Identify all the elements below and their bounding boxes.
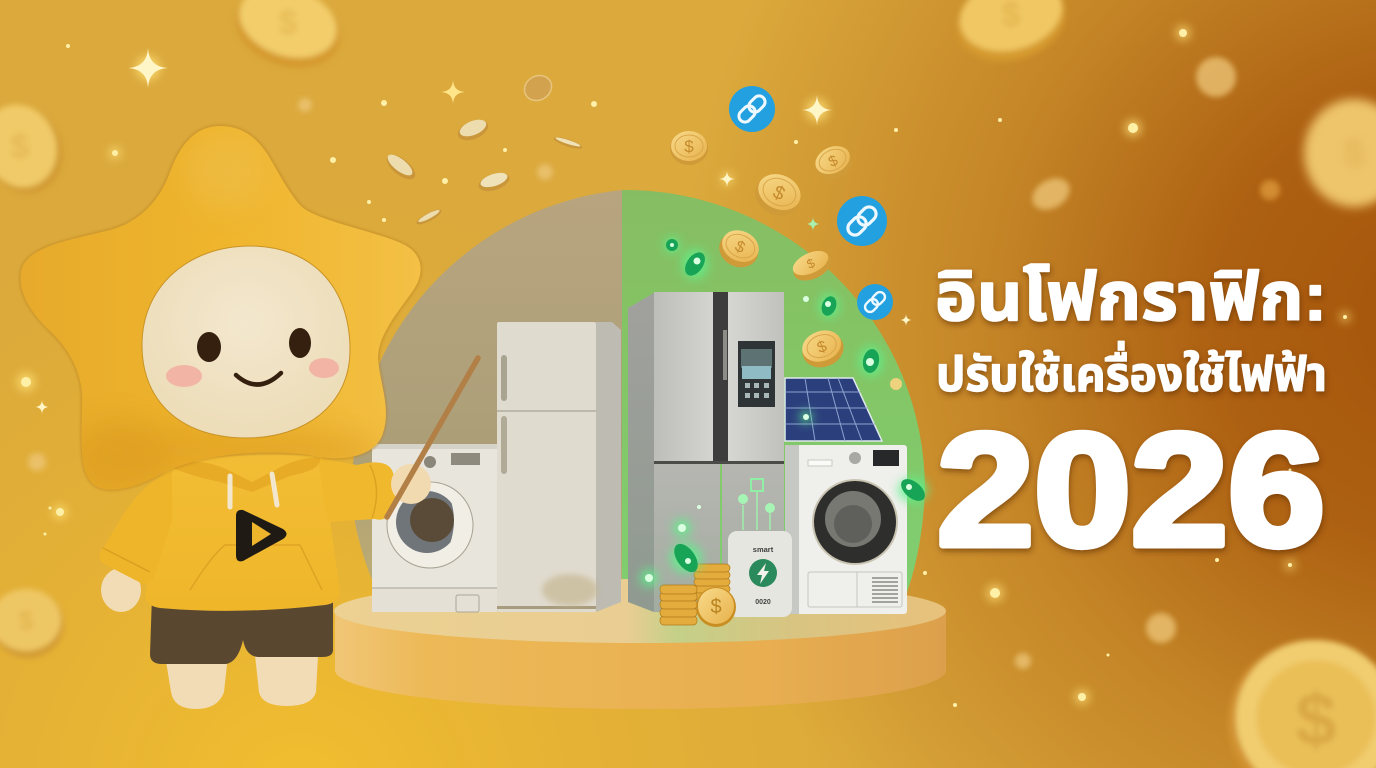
green energy capsules: [640, 237, 929, 587]
badge 2: [837, 196, 887, 246]
old coin 2: [455, 116, 491, 144]
coin 2: [749, 167, 807, 223]
title line 1: อินโฟกราฟิก:: [935, 259, 1327, 335]
play logo: [236, 510, 286, 561]
coin: right: [1304, 99, 1376, 207]
coin: top centre: [225, 0, 351, 81]
title: [935, 259, 1327, 579]
hoodie body: [145, 455, 340, 611]
old coin 3: [383, 150, 419, 184]
coin: right: $: [1343, 133, 1365, 175]
stack front: [660, 585, 697, 625]
left sleeve: [100, 470, 172, 584]
mouth: [236, 373, 281, 385]
coin: lower right: [1228, 640, 1376, 768]
coin: top right: [948, 0, 1074, 73]
old refrigerator: [497, 322, 621, 612]
old coin 1: [520, 71, 556, 105]
podium: [334, 579, 946, 709]
star hood: [20, 126, 420, 490]
smart energy box: [728, 531, 792, 617]
mascot: star character: [0, 110, 478, 709]
shorts: [150, 596, 333, 664]
dome backdrop: old vs new: [352, 190, 925, 610]
old coin 4: [476, 169, 512, 195]
coin 4: $: [732, 238, 748, 257]
smart connection lines: [738, 479, 775, 530]
fridge touch screen: [738, 341, 775, 407]
falling old coins: [383, 71, 583, 227]
stack rear: [694, 564, 730, 600]
left hand: [101, 568, 141, 612]
smart energy box: smart: [753, 545, 774, 554]
coin: lower left: $: [18, 605, 34, 636]
pointer stick: [387, 358, 478, 517]
old coin 6: [415, 207, 443, 227]
coin 6: $: [815, 338, 829, 357]
coin 6: [797, 325, 849, 373]
pocket: [190, 545, 322, 590]
coin 5: [788, 246, 835, 286]
solar panel: [785, 378, 882, 441]
rising gold coins: [670, 131, 902, 390]
coin: top centre: $: [279, 4, 298, 42]
coin: left: $: [11, 128, 30, 166]
soft blurred discs: [28, 57, 1280, 669]
smart refrigerator: [628, 292, 784, 612]
coin 1: [670, 131, 708, 165]
large coin: $: [710, 596, 722, 618]
coin 3: [810, 140, 858, 185]
right arm: [318, 458, 396, 522]
new washing machine: [785, 445, 907, 614]
coin 4: [713, 224, 765, 274]
coin stacks: [660, 564, 736, 627]
cheeks: [166, 358, 339, 387]
coin: lower left: [0, 589, 64, 658]
old washing machine: [372, 444, 497, 612]
hood collar: [168, 458, 320, 492]
link badges: [729, 86, 893, 320]
title line 2: ปรับใช้เครื่องใช้ไฟฟ้า: [936, 341, 1327, 402]
dome right half: [622, 190, 925, 610]
eyes: [197, 328, 311, 362]
badge 3: [857, 284, 893, 320]
face: [142, 246, 350, 438]
smart energy box: 0020: [755, 599, 771, 606]
title year: 2026: [937, 400, 1325, 579]
coin 1: $: [684, 137, 694, 156]
coin 3: $: [826, 152, 841, 171]
badge 1: [729, 86, 775, 132]
drawstrings: [230, 474, 277, 507]
star hood shadow: [21, 126, 421, 490]
coin 2: $: [770, 182, 788, 205]
right hand: [391, 464, 431, 504]
sparkle stars: [35, 48, 912, 414]
coin: left: [0, 94, 75, 204]
old coin 5: [553, 135, 583, 151]
coin: lower right: $: [1295, 678, 1337, 761]
coin 5: $: [804, 255, 818, 272]
legs: [165, 655, 318, 709]
dome left half: [352, 190, 622, 610]
